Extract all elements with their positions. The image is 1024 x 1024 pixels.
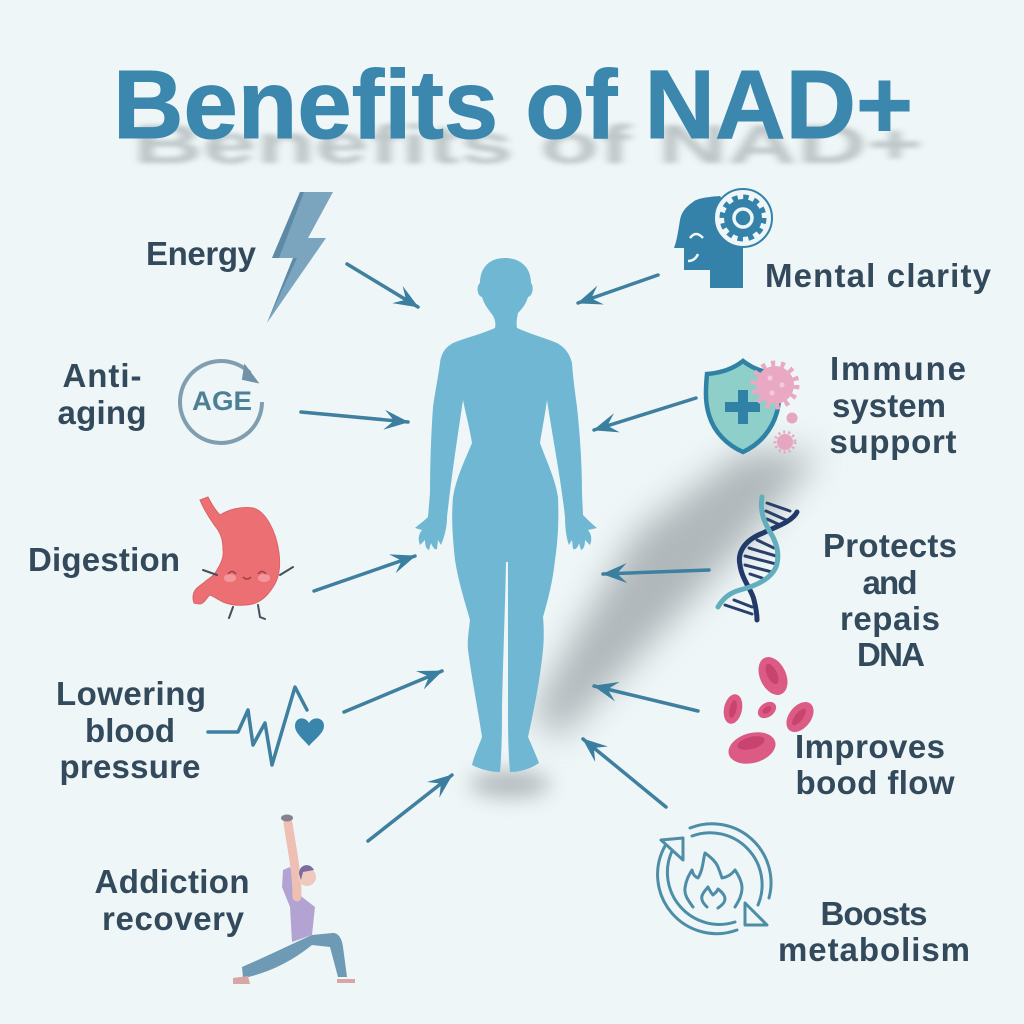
icon: DNA helix [718,497,797,620]
title shadow: Benefits of NAD+ [133,114,923,175]
label: Protects and repairs DNA: repais [840,600,940,637]
label: Protects and repairs DNA: and [862,564,918,601]
label: Immune system support: support [830,423,956,460]
human body figure [415,258,597,772]
label: Immune system support: Immune [830,350,966,387]
icon: head with gear [674,189,772,288]
icon: anti-aging circle [180,361,262,443]
label: Lowering blood pressure: pressure [60,748,200,785]
icon: flame with cycle arrows [658,824,771,934]
icon: heartbeat line [208,687,324,765]
label: Lowering blood pressure: Lowering [56,675,206,712]
label: Protects and repairs DNA [823,527,957,673]
label: Energy: Energy [146,235,257,272]
label: Boosts metabolism: Boosts [820,895,928,932]
arrows [301,264,709,841]
icon: stomach [193,497,293,619]
label: Immune system support: system [832,387,946,424]
label: Improves blood flow [795,728,955,801]
label: Mental clarity: Mental clarity [765,257,992,294]
label: Anti-aging: aging [58,394,146,431]
label: Improves blood flow: Improves [795,728,945,765]
label: Addiction recovery [94,863,250,937]
label: Improves blood flow: bood flow [796,764,955,801]
diagonal body shadow [532,450,820,738]
label: Lowering blood pressure: blood [85,712,175,749]
icon: lightning bolt [267,192,333,323]
icon: anti-aging circle: AGE [192,386,252,416]
label: Boosts metabolism [778,895,970,968]
label: Digestion: Digestion [28,541,180,578]
label: Protects and repairs DNA: DNA [857,636,925,673]
label: Anti-aging [58,357,146,431]
label: Addiction recovery: Addiction [94,863,250,900]
label: Immune system support [830,350,966,460]
label: Addiction recovery: recovery [102,900,245,937]
icon: red blood cells [721,652,819,769]
foot shadow [470,771,550,797]
icon: shield with cross and virus [706,361,798,452]
icon: yoga figure [233,814,355,984]
label: Boosts metabolism: metabolism [778,931,970,968]
label: Protects and repairs DNA: Protects [823,527,957,564]
label: Lowering blood pressure [56,675,206,785]
label: Anti-aging: Anti- [62,357,142,394]
title: Benefits of NAD+ [113,50,913,159]
